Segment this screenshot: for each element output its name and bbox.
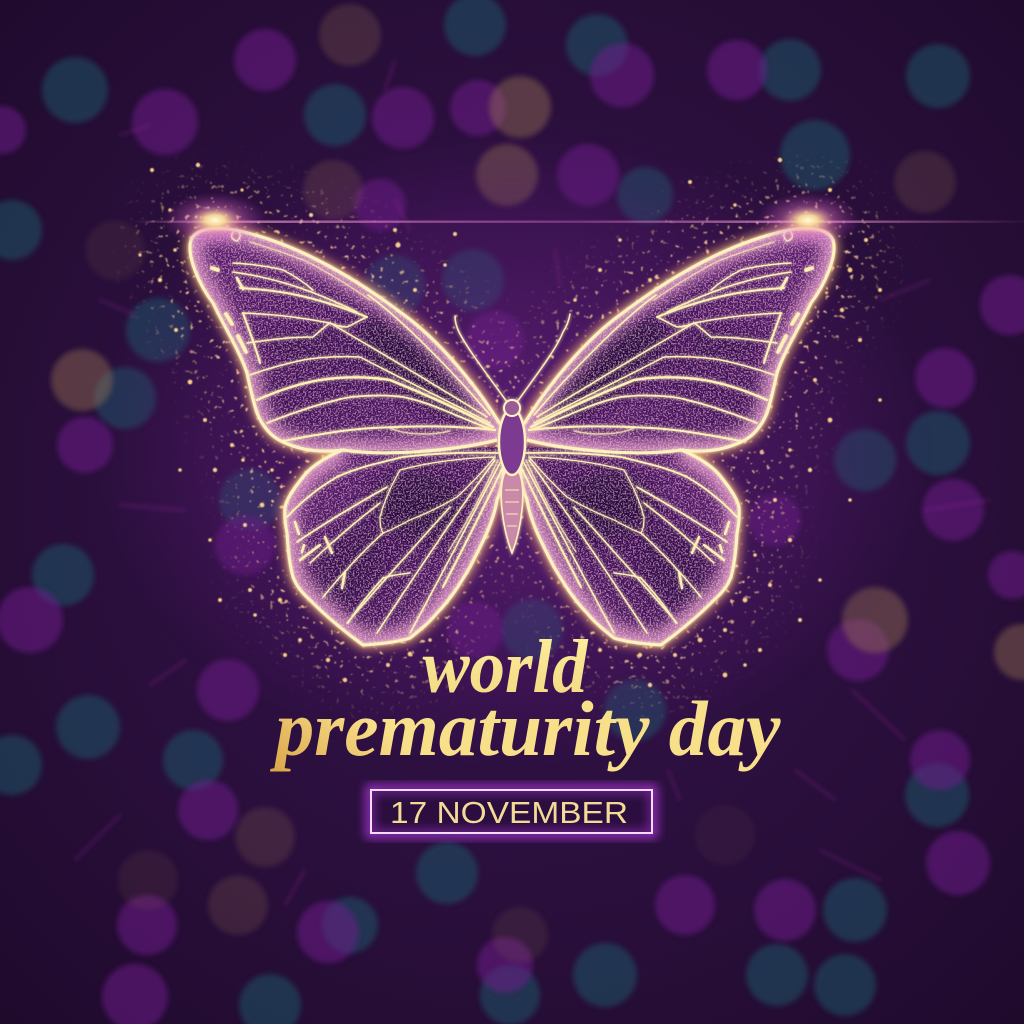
butterfly bbox=[180, 220, 844, 655]
body bbox=[499, 400, 525, 553]
date badge bbox=[370, 789, 653, 834]
title: prematurity day: prematurity day bbox=[270, 685, 781, 772]
right wings bbox=[509, 220, 844, 655]
left wings bbox=[180, 220, 515, 655]
light streaks bbox=[75, 60, 990, 905]
wing-tip flare left bbox=[163, 192, 267, 248]
date text: 17 NOVEMBER bbox=[390, 795, 628, 830]
sparkle particle field bbox=[118, 152, 903, 718]
title: world: world bbox=[422, 625, 588, 709]
horizontal lens flare line bbox=[130, 220, 1024, 223]
antennae bbox=[455, 314, 570, 402]
wing-tip flare right bbox=[756, 192, 860, 248]
gold particles bbox=[138, 158, 882, 687]
purple halo behind butterfly bbox=[92, 130, 932, 770]
